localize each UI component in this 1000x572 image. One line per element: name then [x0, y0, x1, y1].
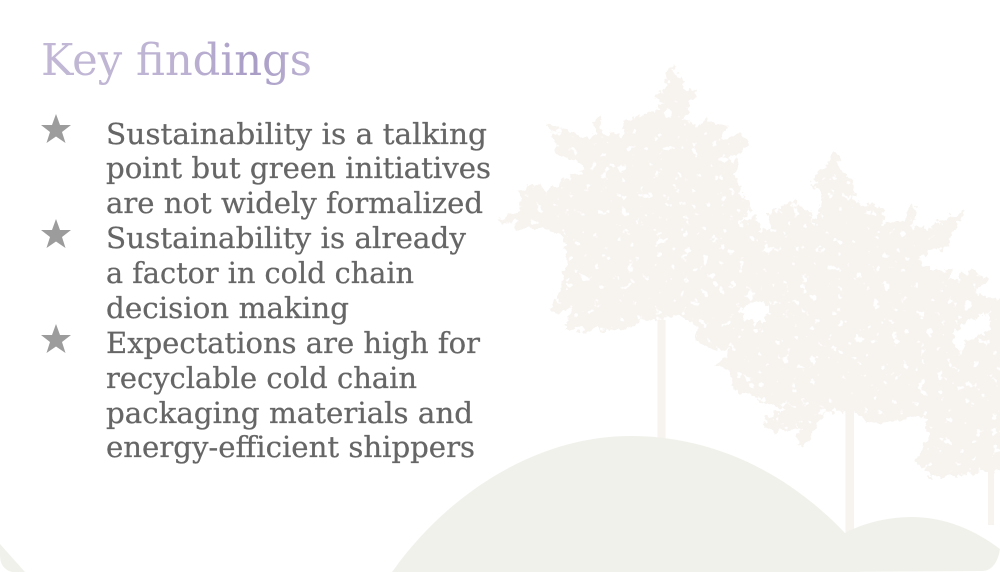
finding 3 text: packaging materials and: [106, 396, 473, 430]
hill: small right: [840, 517, 1000, 572]
hills: [0, 436, 1000, 572]
tree trunk 3: [988, 465, 994, 525]
tree canopies: [497, 62, 1000, 476]
finding 2 text: a factor in cold chain: [106, 256, 414, 290]
tree trunk 2: [846, 405, 854, 535]
bullet list: [41, 114, 491, 464]
title: Key findings: [41, 35, 312, 86]
icon: star 2: [41, 219, 71, 248]
trees silhouette background: [497, 62, 1000, 535]
hill: bottom-left corner: [0, 544, 25, 572]
icon: star 1: [41, 114, 71, 143]
hill: large: [392, 436, 860, 572]
finding 1 text: [106, 117, 491, 220]
finding 2 text: Sustainability is already: [106, 221, 467, 255]
tree trunk 1: [658, 320, 666, 442]
finding 2 text: [106, 221, 467, 325]
finding 1 text: are not widely formalized: [106, 186, 483, 220]
finding 2 text: decision making: [106, 291, 349, 325]
finding 3 text: energy-efficient shippers: [106, 430, 475, 464]
finding 3 text: [106, 326, 480, 464]
finding 3 text: recyclable cold chain: [106, 361, 417, 395]
icon: star 3: [41, 324, 71, 353]
finding 1 text: Sustainability is a talking: [106, 117, 487, 151]
finding 3 text: Expectations are high for: [106, 326, 480, 360]
finding 1 text: point but green initiatives: [106, 151, 491, 185]
